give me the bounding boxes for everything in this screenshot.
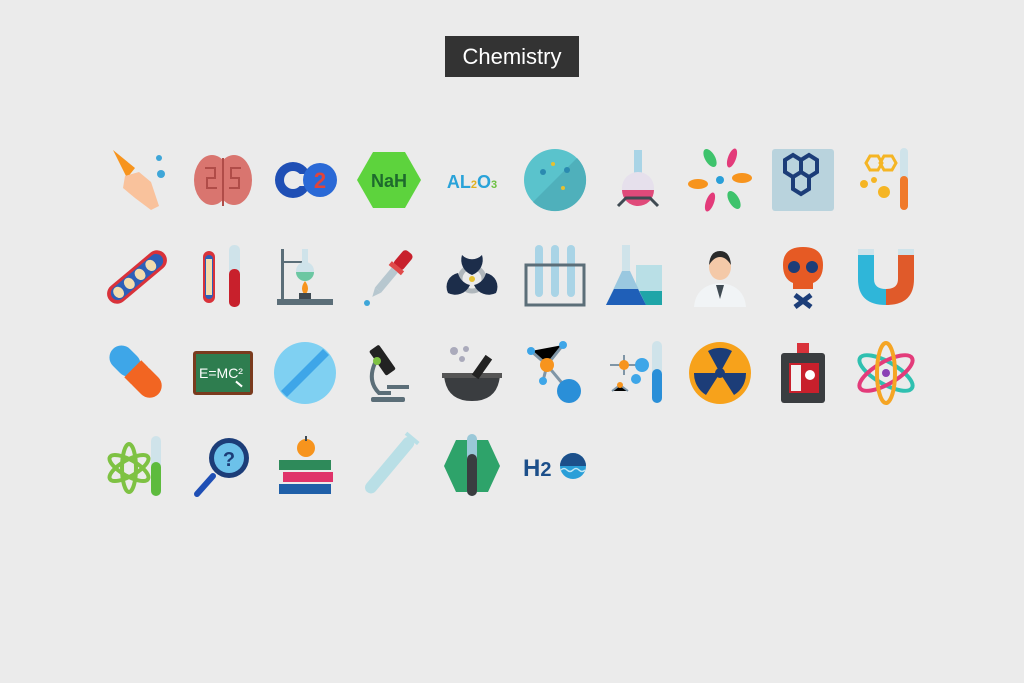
icon: CO2: 2: [314, 168, 326, 193]
icon: hand with drops: [113, 150, 165, 210]
icon: scientist: [694, 251, 746, 307]
icon: molecules with tube: [610, 341, 662, 403]
icon: brain: [194, 155, 252, 206]
title: Chemistry: [462, 44, 562, 69]
icon: H2O: [523, 453, 586, 482]
icon: molecule: [527, 341, 581, 403]
icon: books with apple: [279, 436, 333, 494]
icon: tablet: [274, 342, 336, 404]
icon: H2O: H2: [523, 455, 551, 482]
icon: magnifier question: [197, 438, 249, 494]
icon: biohazard: [447, 255, 497, 295]
icon: microscope: [369, 344, 409, 402]
icon: chalkboard E=MC2: [193, 351, 253, 395]
icon: flask on stand: [618, 150, 658, 206]
icon: magnet: [858, 249, 914, 305]
icon: capsule: [104, 340, 167, 403]
icon: burner stand: [277, 249, 333, 305]
icon: NaH hexagon: NaH: [371, 171, 407, 191]
icon: DNA with test tube: [203, 245, 240, 307]
icon: CO2: [275, 162, 337, 198]
icon: petri dish: [524, 149, 586, 211]
icon: test tube rack: [526, 245, 584, 305]
icon: chalkboard E=MC2: E=MC²: [199, 365, 243, 381]
icon: honeycomb & tube: [860, 148, 908, 210]
icon: test tube diagonal: [361, 432, 420, 497]
icon: flask and beaker: [606, 245, 662, 305]
icon: dropper: [364, 247, 416, 306]
icon: hexagon molecule tile: [772, 149, 834, 211]
icon: green atom with tube: [106, 436, 161, 496]
icon: mortar and pestle: [442, 346, 502, 401]
icon: atom: [855, 343, 917, 403]
icon: NaH hexagon: [357, 152, 421, 208]
icon: DNA helix: [103, 246, 171, 308]
icon: Al2O3: AL2O3: [447, 172, 497, 192]
icon: skull: [783, 247, 823, 307]
title: [445, 36, 579, 77]
icon: magnifier question: ?: [223, 449, 235, 471]
icon: star of leaves: [688, 147, 752, 213]
icon: hexagon with tube: [444, 434, 500, 496]
icon: radiation: [689, 342, 751, 404]
icon: poison bottle: [781, 343, 825, 403]
